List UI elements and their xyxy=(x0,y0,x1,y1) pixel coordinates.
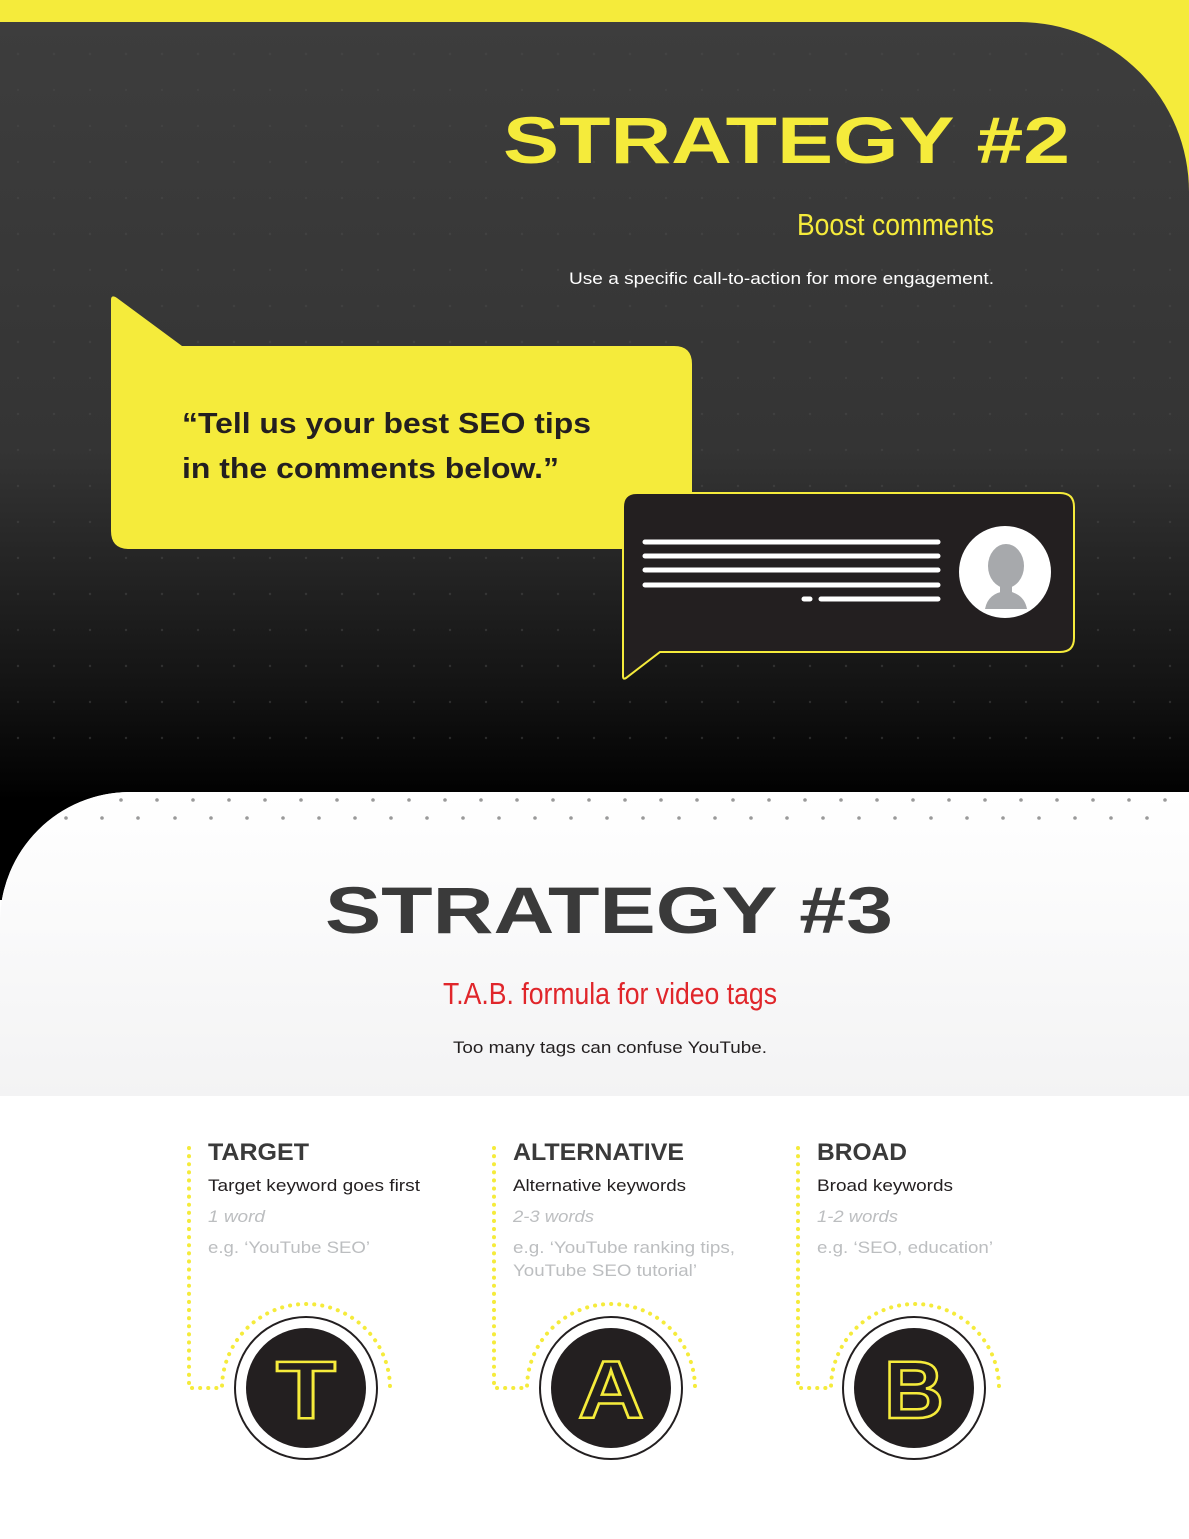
callout: yellow quote bubble xyxy=(111,296,692,549)
background yellow band xyxy=(0,0,1189,800)
column: alternative: Alternative keywords xyxy=(513,1176,686,1195)
column: alternative xyxy=(494,1139,735,1459)
column: broad: 1-2 words xyxy=(817,1207,899,1226)
callout: yellow quote bubble: in the comments below.” xyxy=(182,453,559,485)
icon: avatar xyxy=(959,526,1051,618)
description 3: Too many tags can confuse YouTube. xyxy=(453,1038,767,1057)
column: target xyxy=(189,1139,420,1459)
panel: strategy 2 dark xyxy=(0,22,1189,800)
column: target: TARGET xyxy=(208,1139,309,1166)
column: alternative: ALTERNATIVE xyxy=(513,1139,684,1166)
black backing xyxy=(0,700,1189,900)
column: target: T xyxy=(276,1345,336,1436)
column: target: e.g. ‘YouTube SEO’ xyxy=(208,1238,370,1257)
column: alternative: A xyxy=(578,1345,644,1436)
description 2: Use a specific call-to-action for more engagement. xyxy=(569,269,994,288)
dot rows xyxy=(64,798,1167,820)
callout: yellow quote bubble: “Tell us your best SEO tips xyxy=(182,408,591,440)
column: target: Target keyword goes first xyxy=(208,1176,420,1195)
title: strategy 2: STRATEGY #2 xyxy=(503,103,1070,177)
panel: strategy 3 light xyxy=(0,792,1189,1539)
column: broad: Broad keywords xyxy=(817,1176,953,1195)
subtitle: boost comments: Boost comments xyxy=(797,207,994,242)
column: broad: BROAD xyxy=(817,1139,907,1166)
title: strategy 3: STRATEGY #3 xyxy=(325,873,893,947)
column: alternative: e.g. ‘YouTube ranking tips, xyxy=(513,1238,735,1257)
icon: comment card xyxy=(623,493,1074,679)
column: broad xyxy=(798,1139,999,1459)
column: broad: e.g. ‘SEO, education’ xyxy=(817,1238,993,1257)
column: alternative: 2-3 words xyxy=(512,1207,595,1226)
column: broad: B xyxy=(884,1345,944,1436)
column: target: 1 word xyxy=(208,1207,266,1226)
subtitle: TAB formula: T.A.B. formula for video tags xyxy=(443,976,777,1011)
column: alternative: YouTube SEO tutorial’ xyxy=(513,1261,697,1280)
